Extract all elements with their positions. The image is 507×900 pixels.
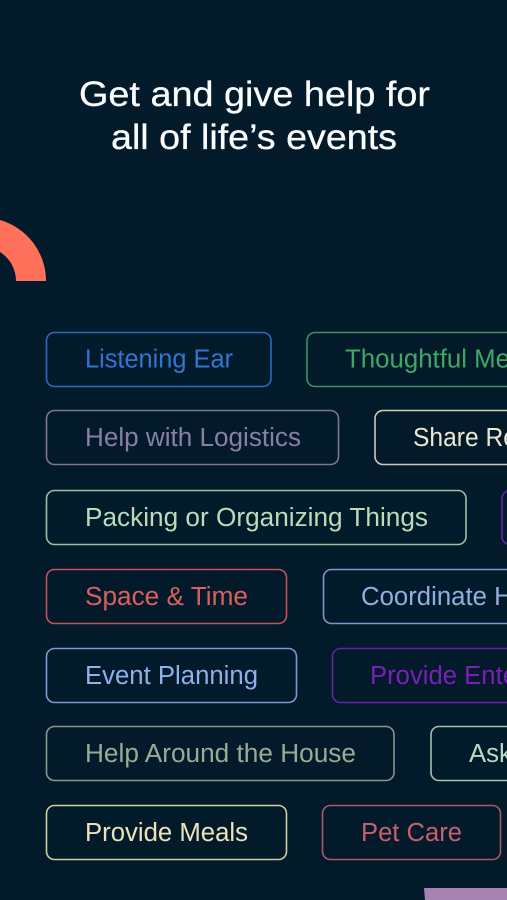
tag: Coordinate Help xyxy=(324,570,507,624)
tag: Pet Care: Pet Care xyxy=(361,819,462,847)
tag: Help Around the House xyxy=(46,726,394,780)
title xyxy=(79,74,430,157)
tag: Help with Logistics xyxy=(46,410,338,464)
tag: Event Planning: Event Planning xyxy=(85,662,258,690)
title: all of life’s events xyxy=(111,117,397,157)
tag: Packing or Organizing Things: Packing or Organizing Things xyxy=(85,504,428,532)
tag: Pet Care xyxy=(322,806,500,860)
icon: coral arc xyxy=(0,220,46,281)
tag: Event Planning xyxy=(46,648,296,702)
tag: Listening Ear xyxy=(46,332,271,386)
tag: Share Resources xyxy=(375,410,507,464)
title: Get and give help for xyxy=(79,74,430,114)
tag: Provide Meals xyxy=(46,806,286,860)
tag: Thoughtful Meals xyxy=(307,332,507,386)
tag: Help with Logistics: Help with Logistics xyxy=(85,424,301,452)
tag: Ask for Help xyxy=(431,726,507,780)
tag: Provide Entertainment xyxy=(332,648,507,702)
tag: Help Around the House: Help Around the House xyxy=(85,740,356,768)
tag: Provide Meals: Provide Meals xyxy=(85,819,248,847)
tag: Space & Time xyxy=(46,570,286,624)
tag: Packing or Organizing Things xyxy=(46,490,466,544)
shape: mauve block xyxy=(424,888,507,900)
tag: purple clipped xyxy=(502,490,507,544)
tag: Listening Ear: Listening Ear xyxy=(85,346,234,374)
tag: Space & Time: Space & Time xyxy=(85,583,248,611)
